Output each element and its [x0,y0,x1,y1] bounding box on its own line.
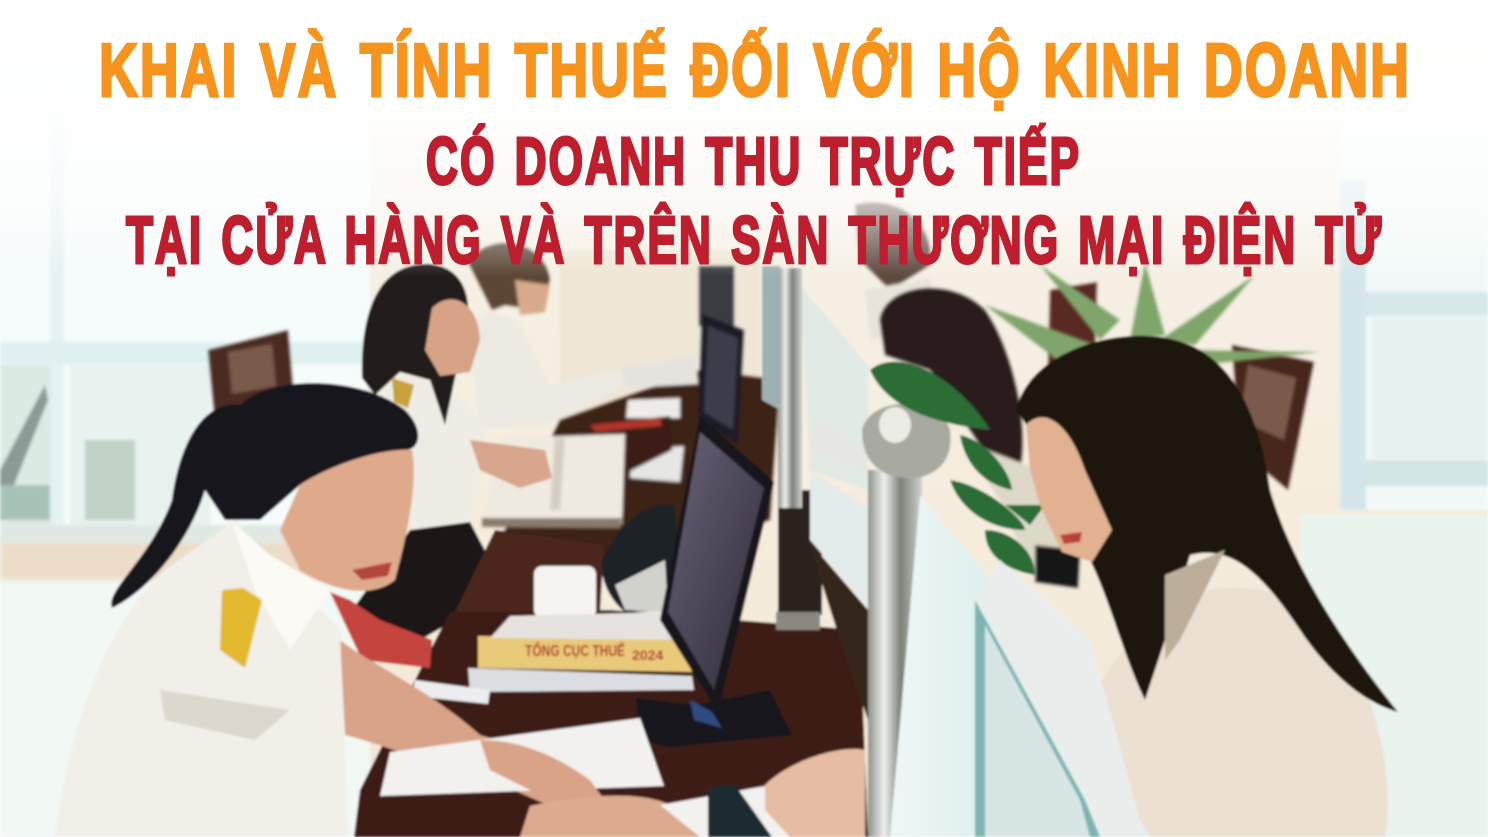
forms and hands on front desk [380,718,865,837]
desk details: cup, tray, calendar, phone [330,504,694,704]
left window frames and garden [0,90,1488,543]
far desk, monitors and papers [470,266,780,620]
front left staff member [55,383,605,837]
right back staff member [880,288,1080,588]
far counter staff [468,202,935,430]
desk details: cup, tray, calendar, phone: TỔNG CỤC THUẾ [525,641,625,660]
foreground glass panel and papers [890,495,1150,837]
back left staff member [352,264,552,640]
title line 2: CÓ DOANH THU TRỰC TIẾP [426,124,1081,199]
back row chairs [208,282,1314,490]
chrome pole and green plant [862,362,1045,837]
title [99,28,1411,278]
front monitor [636,416,792,747]
glass partition and poles [762,266,870,720]
right client woman [1016,336,1398,837]
main desk [354,610,868,837]
potted plant behind counter [985,262,1320,365]
desk details: cup, tray, calendar, phone: 2024 [632,647,663,663]
